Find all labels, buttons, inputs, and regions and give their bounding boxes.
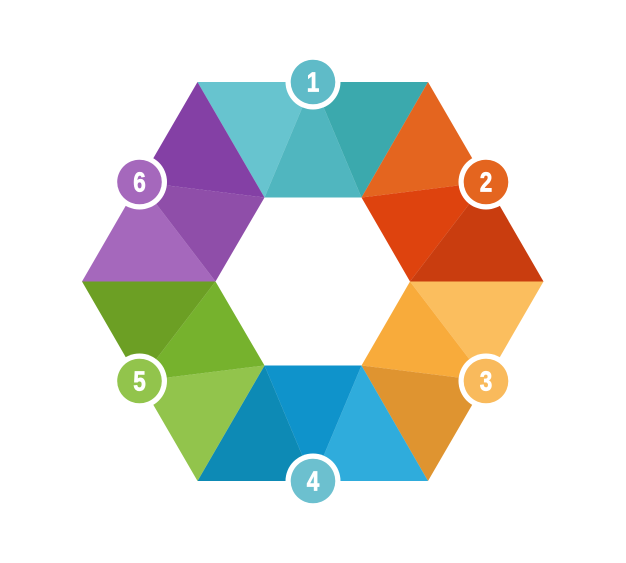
- segment 5: green: [82, 282, 264, 481]
- badge 6: [112, 154, 167, 210]
- badge 1: 1: [307, 68, 319, 98]
- segment 4: blue: [198, 366, 428, 481]
- badge 6: 6: [133, 168, 146, 198]
- badge 5: [112, 354, 167, 408]
- segment 6: purple: [82, 82, 264, 282]
- badge 4: [286, 454, 340, 508]
- segment 3: yellow: [362, 282, 544, 481]
- segment 2: orange: [362, 82, 544, 282]
- segment 1: teal: [198, 82, 428, 198]
- badge 2: [458, 154, 514, 210]
- badge 5: 5: [133, 367, 146, 397]
- badge 3: 3: [480, 367, 492, 397]
- badge 3: [458, 354, 514, 408]
- badge 2: 2: [480, 168, 492, 198]
- badge 4: 4: [307, 467, 319, 497]
- badge 1: [286, 54, 340, 110]
